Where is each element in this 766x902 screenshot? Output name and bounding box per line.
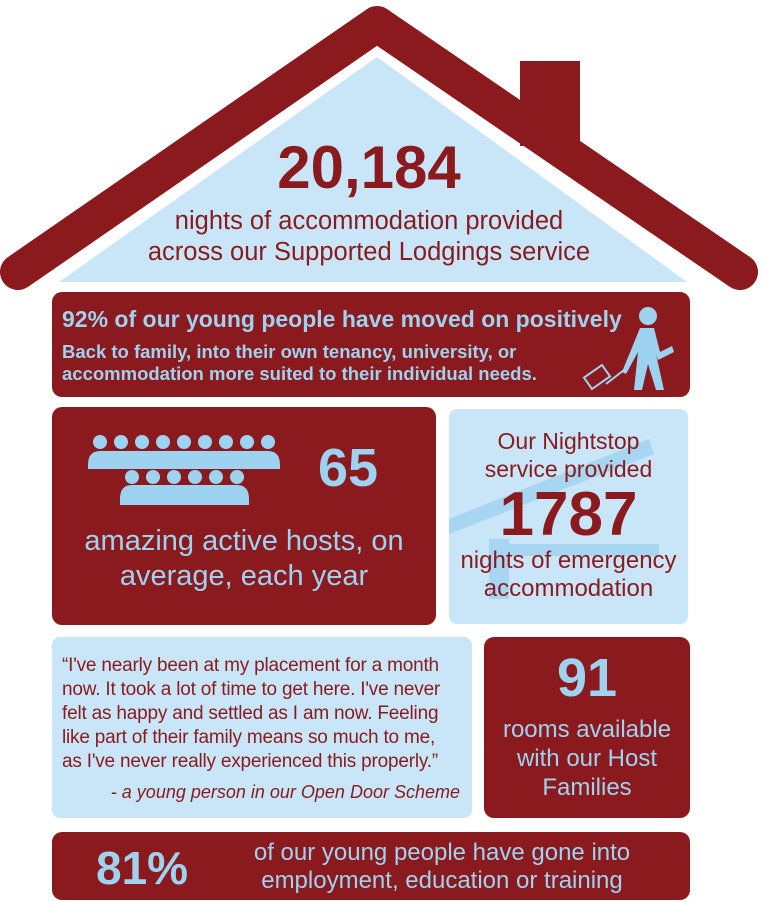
headline stat — [148, 134, 590, 266]
text — [84, 525, 404, 592]
panel: nightstop: service provided — [485, 456, 652, 482]
panel: nightstop — [449, 409, 688, 624]
icon: faded house and moon — [449, 439, 659, 599]
panel: 81%: 81% — [96, 842, 188, 894]
text: Back to family, into their own tenancy, university, or — [62, 341, 516, 362]
panel: nightstop: nights of emergency — [460, 547, 677, 574]
panel: hosts — [52, 407, 436, 625]
text: amazing active hosts, on — [84, 525, 404, 557]
quote text: felt as happy and settled as I am now. Feeling — [62, 703, 438, 724]
attribution: - a young person in our Open Door Scheme — [111, 782, 460, 802]
text: accommodation more suited to their individual needs. — [62, 363, 537, 384]
panel: nightstop: accommodation — [484, 575, 653, 602]
panel: quote — [52, 637, 472, 818]
icon: group of people — [88, 435, 280, 505]
headline stat: across our Supported Lodgings service — [148, 238, 590, 266]
quote text — [62, 655, 440, 772]
quote text: as I've never really experienced this properly.” — [62, 751, 438, 772]
heading: 92% of our young people have moved on positively — [62, 306, 622, 332]
panel: rooms: with our Host — [517, 745, 657, 772]
panel: moved on positively — [52, 292, 690, 397]
headline stat: 20,184 — [277, 134, 461, 201]
panel: rooms: 91 — [557, 648, 617, 708]
panel: 81%: employment, education or training — [261, 867, 623, 894]
chimney — [520, 61, 580, 146]
panel: nightstop: 1787 — [500, 480, 637, 549]
icon: walking person with suitcase — [582, 307, 674, 390]
quote text: now. It took a lot of time to get here. I've never — [62, 679, 440, 700]
panel: rooms: Families — [542, 774, 632, 801]
panel: nightstop: Our Nightstop — [498, 428, 639, 454]
panel: 81%: of our young people have gone into — [254, 839, 630, 866]
roof — [18, 24, 740, 272]
text: average, each year — [120, 560, 368, 592]
stat 65: 65 — [318, 438, 378, 498]
attic triangle — [59, 57, 687, 282]
house roof — [0, 6, 758, 290]
quote text: like part of their family means so much to me, — [62, 727, 435, 748]
panel: rooms: rooms available — [503, 716, 671, 743]
headline stat: nights of accommodation provided — [175, 207, 563, 235]
panel: 81% — [52, 832, 690, 900]
text — [62, 341, 537, 384]
panel: rooms — [484, 637, 690, 818]
quote text: “I've nearly been at my placement for a month — [62, 655, 439, 676]
